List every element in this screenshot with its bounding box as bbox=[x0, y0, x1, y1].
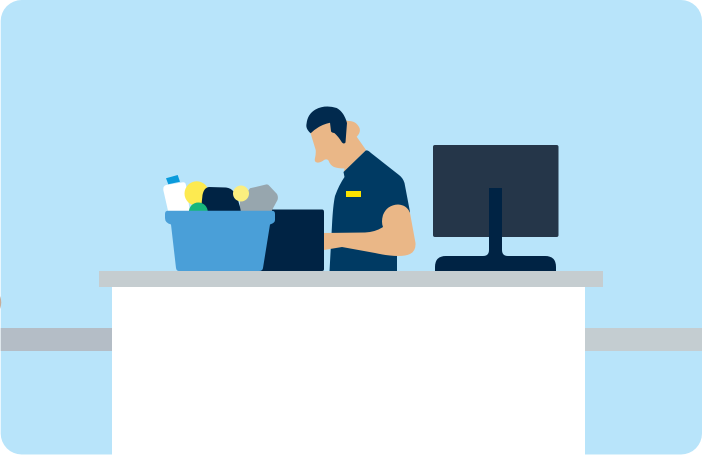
grey package bbox=[240, 184, 278, 212]
bottle cap bbox=[166, 175, 180, 184]
icon: shopping basket with groceries bbox=[163, 175, 278, 271]
skin: face, neck and ear bbox=[310, 115, 366, 172]
basket bbox=[165, 211, 275, 271]
hair bbox=[306, 107, 347, 144]
bottle body bbox=[163, 182, 190, 212]
icon: computer monitor bbox=[433, 145, 558, 271]
monitor stand and base bbox=[435, 188, 556, 271]
shirt bbox=[330, 150, 410, 272]
conveyor belt: right bbox=[585, 328, 702, 351]
name badge bbox=[346, 191, 361, 197]
green fruit bbox=[189, 202, 208, 222]
bottle bbox=[163, 175, 190, 212]
edge fragment: skin tone sliver bbox=[0, 296, 1, 309]
dark package bbox=[201, 187, 241, 212]
yellow fruit bbox=[184, 181, 209, 206]
arm bbox=[323, 204, 416, 256]
conveyor belt: left bbox=[1, 328, 112, 351]
counter top bbox=[99, 271, 603, 287]
counter front bbox=[112, 287, 585, 455]
pale yellow fruit bbox=[233, 186, 249, 202]
figure: cashier bbox=[306, 107, 416, 272]
monitor screen back bbox=[433, 145, 558, 237]
icon: laptop bbox=[258, 210, 324, 271]
